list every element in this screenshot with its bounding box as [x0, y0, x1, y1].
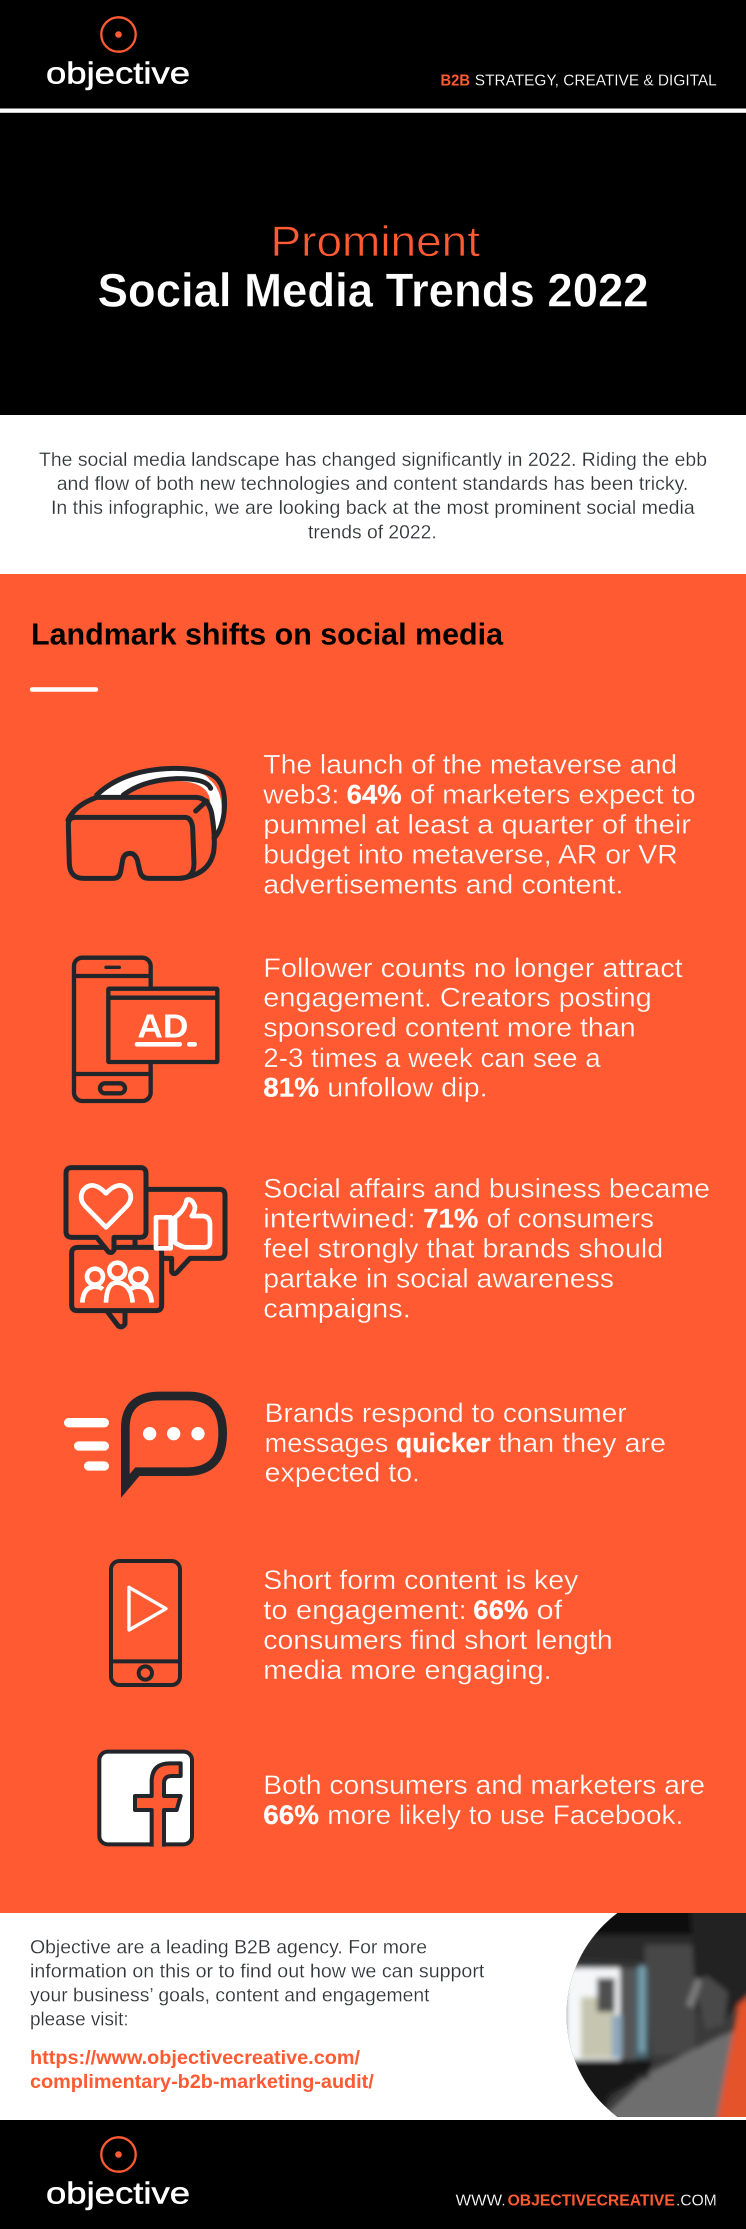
icon: phone with play button [111, 1561, 180, 1685]
text: short form: 66% [473, 1595, 528, 1625]
panel: landmark shifts [0, 574, 746, 1913]
icon: social bubbles [66, 1168, 225, 1327]
icon: facebook [99, 1752, 192, 1847]
text: short form: Short form content is key [263, 1565, 579, 1595]
website address: WWW. [456, 2193, 506, 2210]
tagline: STRATEGY, CREATIVE & DIGITAL [475, 72, 717, 89]
text: follower counts: engagement. Creators posting [263, 983, 652, 1013]
intro text: trends of 2022. [308, 521, 437, 543]
text: facebook: Both consumers and marketers are [263, 1770, 705, 1800]
text: social affairs: feel strongly that brands should [263, 1234, 663, 1264]
intro text: and flow of both new technologies and content standards has been tricky. [57, 473, 688, 495]
logo: objective [46, 17, 190, 91]
text: follower counts: 81% [263, 1073, 319, 1103]
intro text: The social media landscape has changed significantly in 2022. Riding the ebb [39, 449, 707, 471]
logo: objective footer [46, 2137, 190, 2211]
heading underline [30, 687, 98, 692]
text: metaverse: of marketers expect to [410, 780, 696, 810]
text: social affairs: Social affairs and business became [263, 1174, 710, 1204]
text: short form [263, 1565, 613, 1685]
text: metaverse: 64% [347, 780, 402, 810]
text: brands respond: messages [265, 1428, 388, 1458]
text: social affairs: intertwined: [263, 1204, 416, 1234]
text: follower counts: sponsored content more than [263, 1013, 636, 1043]
text: audit link [30, 2047, 374, 2093]
text: short form: of [537, 1595, 563, 1625]
text: social affairs: 71% [423, 1204, 478, 1234]
text: facebook: 66% [263, 1800, 319, 1830]
logo: objective footer: objective [46, 2176, 190, 2211]
text: follower counts: Follower counts no longer attract [263, 953, 683, 983]
text: brands respond [265, 1398, 666, 1488]
panel: footer [0, 2120, 746, 2229]
text: follower counts [263, 953, 683, 1103]
intro text: In this infographic, we are looking back at the most prominent social media [51, 497, 695, 519]
text: social affairs: partake in social awareness [263, 1264, 614, 1294]
text: agency description: Objective are a leading B2B agency. For more [30, 1936, 427, 1958]
website address [456, 2193, 717, 2210]
text: metaverse: The launch of the metaverse and [263, 750, 677, 780]
title: Prominent [270, 218, 480, 266]
title [98, 218, 649, 317]
text: follower counts: unfollow dip. [327, 1073, 488, 1103]
text: short form: to engagement: [263, 1595, 467, 1625]
title: Social Media Trends 2022 [98, 264, 649, 317]
text: short form: consumers find short length [263, 1625, 613, 1655]
text: agency description: information on this or to find out how we can support [30, 1960, 485, 1982]
text: social affairs: campaigns. [263, 1294, 411, 1324]
text: metaverse: web3: [262, 780, 339, 810]
text: brands respond: than they are [498, 1428, 666, 1458]
text: agency description: your business’ goals, content and engagement [30, 1984, 430, 2006]
logo: objective: objective [46, 56, 190, 91]
text: brands respond: expected to. [265, 1458, 420, 1488]
text: brands respond: Brands respond to consumer [265, 1398, 627, 1428]
photo: person at a monitor [566, 1913, 746, 2117]
text: metaverse: advertisements and content. [263, 870, 623, 900]
text: agency description [30, 1936, 485, 2030]
text: agency description: please visit: [30, 2008, 129, 2030]
text: short form: media more engaging. [263, 1655, 552, 1685]
tagline: B2B [440, 72, 470, 89]
text: metaverse: budget into metaverse, AR or VR [263, 839, 678, 869]
text: audit link: https://www.objectivecreative.com/ [30, 2047, 361, 2069]
text: audit link: complimentary-b2b-marketing-audit/ [30, 2071, 374, 2093]
text: brands respond: quicker [396, 1428, 491, 1458]
text: facebook: more likely to use Facebook. [327, 1800, 683, 1830]
icon: phone with AD: AD [137, 1008, 188, 1045]
panel: header [0, 0, 746, 415]
website address: OBJECTIVECREATIVE [508, 2193, 675, 2210]
text: social affairs: of consumers [487, 1204, 654, 1234]
text: metaverse: pummel at least a quarter of their [263, 810, 691, 840]
intro text [39, 449, 707, 543]
heading: Landmark shifts on social media [31, 617, 504, 652]
icon: fast chat bubble [64, 1396, 223, 1486]
text: facebook [263, 1770, 705, 1830]
text: metaverse [262, 750, 696, 900]
icon: VR headset [68, 768, 225, 878]
icon: phone with AD [74, 958, 217, 1101]
text: social affairs [263, 1174, 710, 1324]
website address: .COM [676, 2193, 717, 2210]
text: follower counts: 2-3 times a week can see a [263, 1043, 601, 1073]
